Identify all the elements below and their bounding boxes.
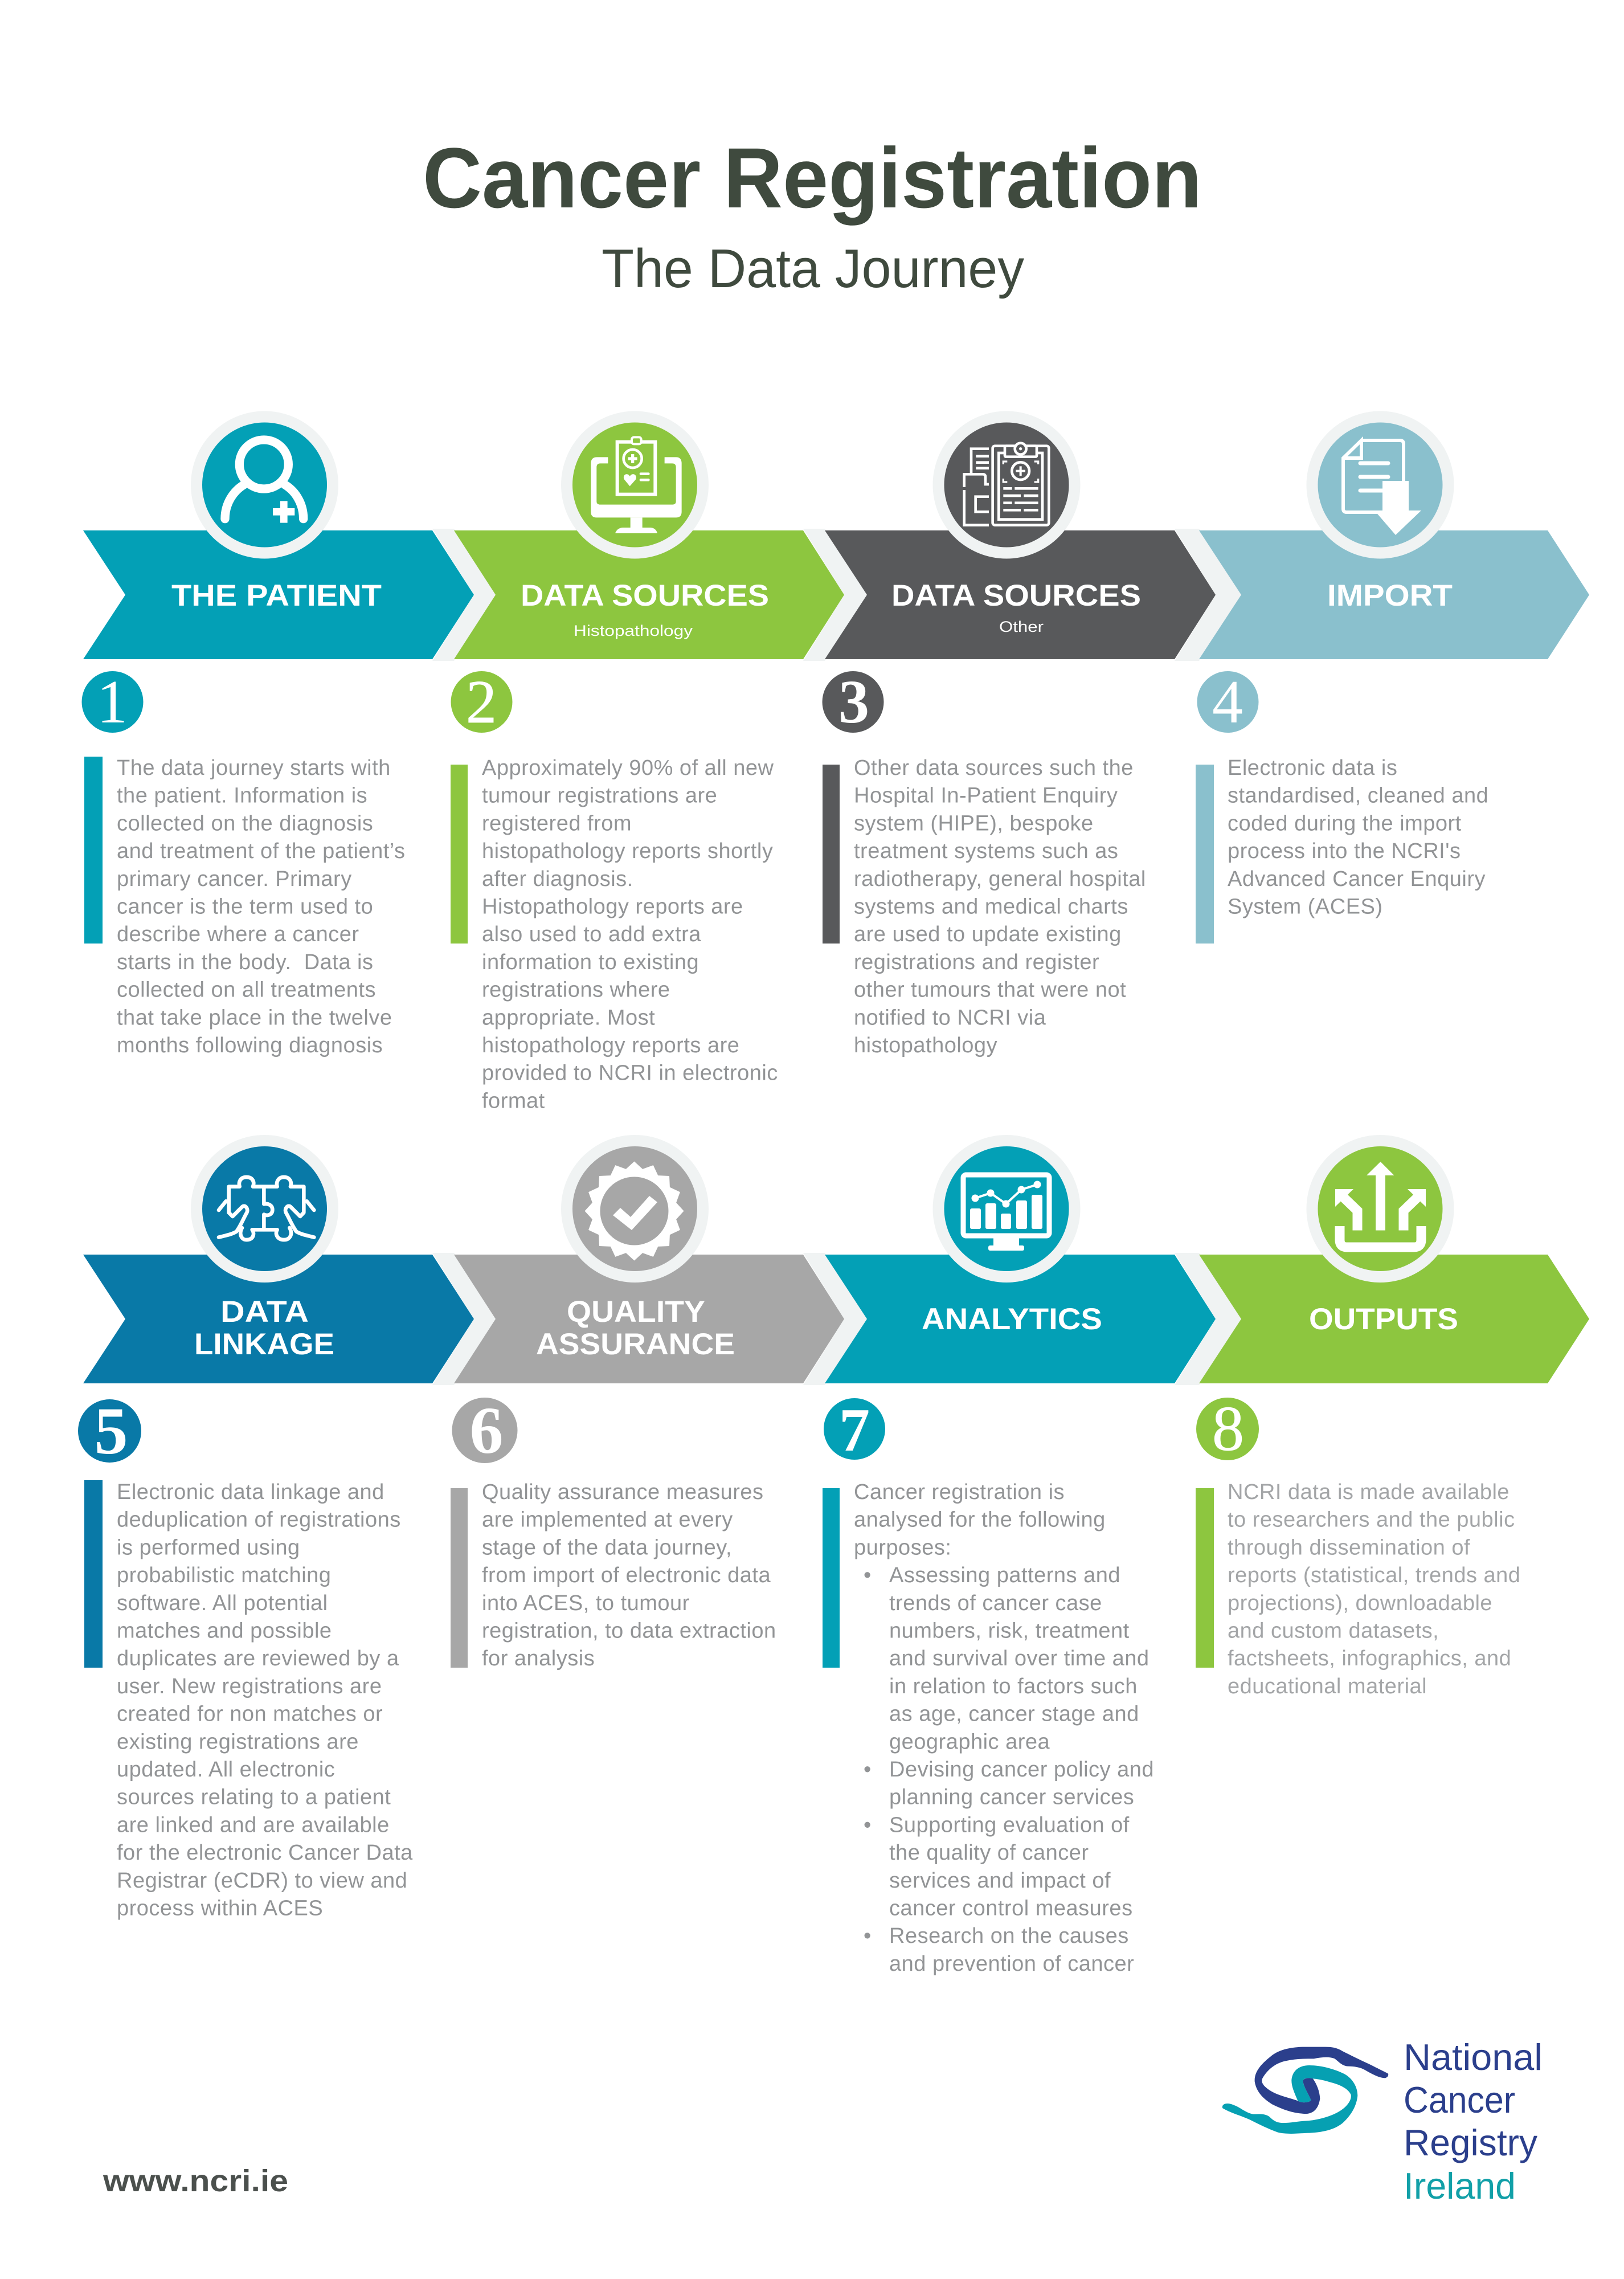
panel: step 5 data linkage: [78, 1135, 474, 1920]
logo text: Cancer: [1404, 2079, 1515, 2121]
icon: puzzle and hands: [191, 1135, 338, 1283]
text: step 1: collected on all treatments: [117, 978, 376, 1002]
sublabel: histopathology: Histopathology: [574, 622, 693, 639]
text: step 4: Advanced Cancer Enquiry: [1228, 867, 1486, 891]
number 7: [824, 1396, 885, 1464]
icon: quality badge with check: [561, 1135, 709, 1283]
logo mark: [1222, 2047, 1388, 2134]
text: step 2: provided to NCRI in electronic: [482, 1061, 778, 1085]
text: step 8: through dissemination of: [1228, 1535, 1470, 1559]
text: step 8: to researchers and the public: [1228, 1508, 1515, 1532]
accent bar 2: [451, 765, 468, 944]
website url: www.ncri.ie: [103, 2164, 288, 2198]
arrow: quality assurance: [454, 1255, 844, 1383]
text: step 2: information to existing: [482, 950, 699, 974]
text: step 7: the quality of cancer: [889, 1841, 1089, 1865]
text: step 2: registered from: [482, 811, 632, 835]
text: step 5: Electronic data linkage and: [117, 1480, 384, 1504]
text: step 1: and treatment of the patient’s: [117, 839, 406, 863]
arrow: data linkage: [83, 1255, 474, 1383]
label: outputs: OUTPUTS: [1309, 1302, 1458, 1336]
label: data sources: DATA SOURCES: [891, 579, 1141, 612]
label: quality assurance: ASSURANCE: [536, 1328, 735, 1361]
text: step 3: radiotherapy, general hospital: [854, 867, 1146, 891]
arrow: analytics: [825, 1255, 1216, 1383]
label: import: IMPORT: [1327, 579, 1453, 612]
label: quality assurance: [536, 1295, 735, 1361]
number 7: 7: [839, 1396, 870, 1464]
number 8: 8: [1212, 1394, 1244, 1464]
subtitle: The Data Journey: [602, 238, 1024, 299]
text: step 7: Supporting evaluation of: [889, 1813, 1130, 1837]
text: step 5: deduplication of registrations: [117, 1508, 401, 1532]
logo: National Cancer Registry Ireland: [1222, 2036, 1543, 2207]
text: step 1: the patient. Information is: [117, 784, 367, 808]
text: step 1: collected on the diagnosis: [117, 811, 373, 835]
text: step 5: created for non matches or: [117, 1702, 383, 1726]
panel: step 6 quality assurance: [451, 1135, 844, 1671]
accent bar 5: [84, 1480, 103, 1668]
arrow: data sources histopathology: [454, 530, 844, 659]
arrow: outputs: [1199, 1255, 1589, 1383]
text: step 2: histopathology reports shortly: [482, 839, 773, 863]
text: step 4: System (ACES): [1228, 895, 1383, 918]
number 5: [78, 1394, 141, 1468]
text: step 8: NCRI data is made available: [1228, 1480, 1510, 1504]
text: step 7: planning cancer services: [889, 1786, 1134, 1810]
text: step 7: Devising cancer policy and: [889, 1758, 1154, 1782]
text: step 7: •: [864, 1924, 872, 1948]
logo text: Registry: [1404, 2122, 1537, 2163]
text: step 7: •: [864, 1813, 872, 1837]
text: step 7: cancer control measures: [889, 1896, 1133, 1920]
panel: step 8 outputs: [1196, 1135, 1589, 1698]
panel: step 3 data sources other: [823, 411, 1216, 1057]
text: step 2: tumour registrations are: [482, 784, 717, 808]
title: Cancer Registration: [423, 130, 1202, 226]
text: step 7: Research on the causes: [889, 1924, 1129, 1948]
text: step 5: updated. All electronic: [117, 1758, 335, 1782]
number 5: 5: [95, 1394, 128, 1468]
number 6: [452, 1393, 517, 1468]
text: step 2: registrations where: [482, 978, 670, 1002]
number 4: [1197, 668, 1259, 736]
text: step 7: in relation to factors such: [889, 1674, 1138, 1698]
text: step 5: for the electronic Cancer Data: [117, 1841, 413, 1865]
panel: step 4 import: [1196, 411, 1589, 944]
text: step 7: Cancer registration is: [854, 1480, 1065, 1504]
number 3: [823, 668, 884, 736]
text: step 5: probabilistic matching: [117, 1563, 331, 1587]
text: step 1: The data journey starts with: [117, 756, 391, 780]
logo text: [1404, 2036, 1543, 2207]
number 2: 2: [466, 668, 497, 736]
text: step 6: registration, to data extraction: [482, 1619, 776, 1643]
text: step 7: geographic area: [889, 1730, 1050, 1754]
text: step 7: analysed for the following: [854, 1508, 1106, 1532]
text: step 8: and custom datasets,: [1228, 1619, 1439, 1643]
text: step 7: purposes:: [854, 1535, 951, 1559]
text: step 2: Approximately 90% of all new: [482, 756, 774, 780]
text: step 2: after diagnosis.: [482, 867, 633, 891]
text: step 3: histopathology: [854, 1034, 997, 1057]
text: step 2: format: [482, 1089, 545, 1113]
text: step 7: as age, cancer stage and: [889, 1702, 1139, 1726]
number 6: 6: [469, 1393, 504, 1468]
text: step 4: coded during the import: [1228, 811, 1462, 835]
icon: monitor with chart: [933, 1135, 1080, 1283]
accent bar 7: [823, 1488, 840, 1668]
text: step 3: are used to update existing: [854, 922, 1122, 946]
text: step 2: also used to add extra: [482, 922, 701, 946]
text: step 7: Assessing patterns and: [889, 1563, 1120, 1587]
text: step 3: system (HIPE), bespoke: [854, 811, 1094, 835]
icon: document download: [1307, 411, 1454, 558]
text: step 3: registrations and register: [854, 950, 1099, 974]
text: step 6: Quality assurance measures: [482, 1480, 764, 1504]
number 3: 3: [838, 668, 869, 736]
text: step 3: other tumours that were not: [854, 978, 1126, 1002]
arrow: data sources other: [825, 530, 1216, 659]
text: step 6: stage of the data journey,: [482, 1535, 732, 1559]
number 8: [1196, 1394, 1259, 1464]
text: step 5: matches and possible: [117, 1619, 332, 1643]
logo text: Ireland: [1404, 2165, 1516, 2207]
text: step 4: standardised, cleaned and: [1228, 784, 1488, 808]
arrow: import: [1199, 530, 1589, 659]
text: step 7: [854, 1480, 1154, 1976]
text: step 7: and survival over time and: [889, 1647, 1150, 1671]
icon: clipboard and folder: [933, 411, 1080, 558]
text: step 5: sources relating to a patient: [117, 1786, 391, 1810]
text: step 5: user. New registrations are: [117, 1674, 382, 1698]
text: step 7: and prevention of cancer: [889, 1952, 1134, 1976]
text: step 3: Hospital In-Patient Enquiry: [854, 784, 1118, 808]
icon: outgoing arrows: [1307, 1135, 1454, 1283]
number 2: [451, 668, 513, 736]
text: step 7: •: [864, 1563, 872, 1587]
text: step 6: into ACES, to tumour: [482, 1591, 690, 1615]
logo text: National: [1404, 2036, 1543, 2078]
text: step 7: •: [864, 1758, 872, 1782]
text: step 2: Histopathology reports are: [482, 895, 743, 918]
text: step 1: cancer is the term used to: [117, 895, 373, 918]
label: analytics: ANALYTICS: [922, 1302, 1102, 1336]
text: step 6: are implemented at every: [482, 1508, 733, 1532]
text: step 1: that take place in the twelve: [117, 1006, 392, 1030]
accent bar 6: [451, 1488, 468, 1668]
text: step 5: duplicates are reviewed by a: [117, 1647, 399, 1671]
label: data linkage: [194, 1295, 334, 1361]
label: data linkage: LINKAGE: [194, 1328, 334, 1361]
icon: patient: [191, 411, 338, 558]
text: step 8: reports (statistical, trends and: [1228, 1563, 1520, 1587]
label: the patient: THE PATIENT: [171, 579, 382, 612]
text: step 5: Registrar (eCDR) to view and: [117, 1869, 407, 1893]
text: step 6: from import of electronic data: [482, 1563, 771, 1587]
panel: step 1 the patient: [82, 411, 474, 1057]
panel: step 2 data sources histopathology: [451, 411, 844, 1113]
text: step 2: appropriate. Most: [482, 1006, 655, 1030]
text: step 1: months following diagnosis: [117, 1034, 383, 1057]
text: step 1: describe where a cancer: [117, 922, 359, 946]
text: step 7: trends of cancer case: [889, 1591, 1102, 1615]
icon: monitor with clipboard: [561, 411, 709, 558]
panel: step 7 analytics: [823, 1135, 1216, 1976]
number 4: 4: [1212, 668, 1243, 736]
text: step 5: are linked and are available: [117, 1813, 390, 1837]
text: step 8: factsheets, infographics, and: [1228, 1647, 1511, 1671]
text: step 8: projections), downloadable: [1228, 1591, 1492, 1615]
text: step 5: is performed using: [117, 1535, 300, 1559]
text: step 3: notified to NCRI via: [854, 1006, 1046, 1030]
text: step 1: starts in the body. Data is: [117, 950, 374, 974]
accent bar 4: [1196, 765, 1214, 944]
text: step 3: treatment systems such as: [854, 839, 1118, 863]
text: step 3: Other data sources such the: [854, 756, 1134, 780]
text: step 4: Electronic data is: [1228, 756, 1397, 780]
text: step 1: primary cancer. Primary: [117, 867, 352, 891]
text: step 5: software. All potential: [117, 1591, 328, 1615]
accent bar 3: [823, 765, 840, 944]
accent bar 1: [84, 757, 103, 944]
text: step 7: services and impact of: [889, 1869, 1111, 1893]
number 1: 1: [97, 668, 128, 736]
label: data sources: DATA SOURCES: [521, 579, 769, 612]
arrow: the patient: [83, 530, 474, 659]
text: step 8: educational material: [1228, 1674, 1427, 1698]
sublabel: other: Other: [999, 618, 1044, 635]
number 1: [82, 668, 144, 736]
label: quality assurance: QUALITY: [567, 1295, 705, 1329]
text: step 2: histopathology reports are: [482, 1034, 739, 1057]
text: step 5: existing registrations are: [117, 1730, 359, 1754]
text: step 6: for analysis: [482, 1647, 595, 1671]
accent bar 8: [1196, 1488, 1214, 1668]
text: step 7: numbers, risk, treatment: [889, 1619, 1130, 1643]
text: step 5: process within ACES: [117, 1896, 323, 1920]
text: step 3: systems and medical charts: [854, 895, 1128, 918]
text: step 4: process into the NCRI's: [1228, 839, 1461, 863]
label: data linkage: DATA: [220, 1295, 309, 1329]
